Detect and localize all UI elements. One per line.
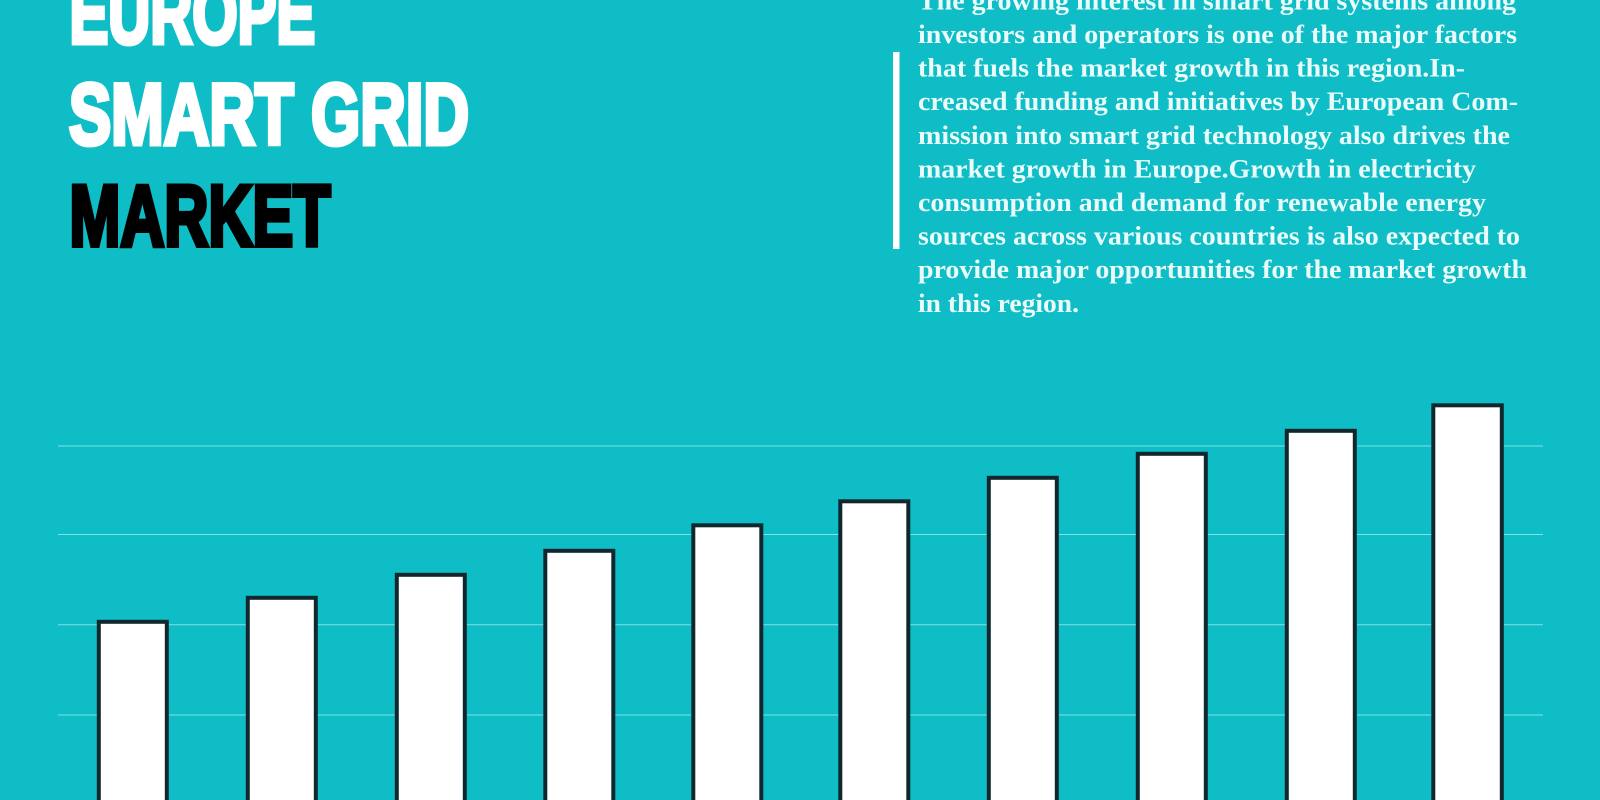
- description text block: consumption and demand for renewable energy: [918, 187, 1486, 217]
- bar chart: [58, 405, 1543, 800]
- bar 8: [1138, 454, 1206, 800]
- bar 6: [840, 501, 908, 800]
- title line: Market: MARKET: [70, 168, 330, 264]
- description text block: mission into smart grid technology also drives the: [918, 120, 1510, 150]
- description text block: sources across various countries is also expected to: [918, 221, 1520, 251]
- white vertical accent bar: [893, 52, 900, 249]
- title: [69, 0, 469, 264]
- description text block: market growth in Europe.Growth in electricity: [918, 153, 1476, 183]
- bar 2: [248, 598, 316, 800]
- bar 5: [693, 525, 761, 800]
- description text block: that fuels the market growth in this region.In-: [918, 53, 1465, 83]
- description text block: provide major opportunities for the market growth: [918, 254, 1527, 284]
- bar 10: [1433, 405, 1502, 800]
- bar 1: [99, 622, 167, 800]
- bar 4: [545, 551, 613, 800]
- bar 7: [989, 478, 1057, 800]
- bar 3: [397, 575, 465, 800]
- description text block: creased funding and initiatives by European Com-: [918, 86, 1518, 116]
- description text block: investors and operators is one of the major factors: [918, 19, 1517, 49]
- bar 9: [1287, 431, 1355, 800]
- description text block: in this region.: [918, 288, 1079, 318]
- description text block: [918, 0, 1527, 318]
- title line: Smart Grid: SMART GRID: [69, 67, 469, 163]
